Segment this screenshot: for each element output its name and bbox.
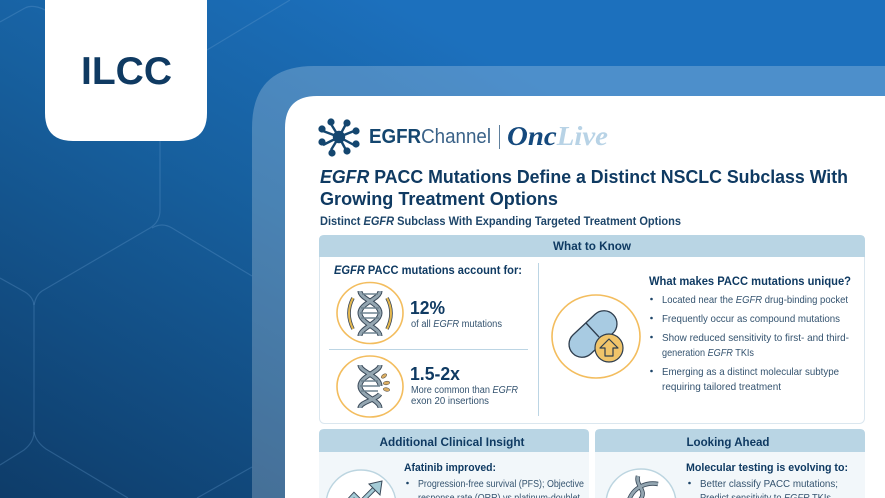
title: Growing Treatment Options bbox=[320, 188, 558, 209]
stat: 1.5-2x bbox=[411, 367, 518, 404]
stat: 12% bbox=[411, 301, 502, 327]
panel: what to know bbox=[319, 235, 865, 424]
insight header bbox=[319, 429, 589, 452]
bullet list: unique features: requiring tailored treatment bbox=[662, 381, 781, 393]
stat: 12%: of all EGFR mutations bbox=[411, 319, 502, 330]
icon: molecule bbox=[320, 120, 358, 155]
looking ahead heading: Molecular testing is evolving to: bbox=[686, 462, 848, 474]
ILCC tag bbox=[45, 0, 207, 141]
bullet list: unique features: Emerging as a distinct molecular subtype bbox=[662, 366, 839, 378]
left column heading: EGFR PACC mutations account for: bbox=[334, 265, 522, 277]
stat: 1.5-2x: 1.5-2x bbox=[410, 364, 460, 384]
looking ahead header: Looking Ahead bbox=[686, 435, 770, 449]
insight bullets bbox=[406, 478, 584, 498]
stat: 1.5-2x: exon 20 insertions bbox=[411, 396, 489, 407]
looking ahead bullets bbox=[688, 478, 838, 498]
icon: DNA strand bbox=[606, 469, 676, 498]
white document card bbox=[285, 96, 885, 498]
ILCC tag: ILCC bbox=[81, 50, 172, 93]
title: EGFR PACC Mutations Define a Distinct NSCLC Subclass With bbox=[320, 166, 848, 187]
bullet list: unique features bbox=[650, 294, 849, 393]
bullet list: unique features: Frequently occur as compound mutations bbox=[662, 313, 840, 325]
what to know header bbox=[319, 235, 865, 257]
stat: 1.5-2x: More common than EGFR bbox=[411, 385, 518, 396]
looking ahead bullets: Better classify PACC mutations; bbox=[700, 478, 838, 490]
insight bullets: Progression-free survival (PFS); Objective bbox=[418, 478, 584, 490]
panel: looking ahead bbox=[595, 429, 865, 498]
what to know header: What to Know bbox=[553, 239, 632, 253]
bullet list: unique features: Show reduced sensitivity to first- and third- bbox=[662, 332, 849, 344]
logo: EGFR Channel and OncLive: EGFRChannel bbox=[369, 126, 491, 148]
looking ahead header bbox=[595, 429, 865, 452]
logo: EGFR Channel and OncLive bbox=[320, 120, 608, 155]
bullet list: unique features: Located near the EGFR drug-binding pocket bbox=[662, 294, 848, 306]
icon: DNA with arcs bbox=[337, 282, 403, 344]
title bbox=[320, 166, 848, 209]
insight heading: Afatinib improved: bbox=[404, 462, 496, 474]
logo: EGFR Channel and OncLive: OncLive bbox=[507, 121, 608, 151]
outer translucent frame bbox=[252, 66, 885, 498]
icon: rising arrow bbox=[326, 470, 396, 498]
icon: DNA with fragments bbox=[337, 356, 403, 417]
stat: 12%: 12% bbox=[410, 298, 445, 318]
subtitle: Distinct EGFR Subclass With Expanding Targeted Treatment Options bbox=[320, 214, 681, 228]
unique heading: What makes PACC mutations unique? bbox=[649, 274, 851, 288]
insight header: Additional Clinical Insight bbox=[380, 435, 524, 449]
panel: additional clinical insight bbox=[319, 429, 589, 498]
bullet list: unique features: generation EGFR TKIs bbox=[662, 347, 754, 359]
icon: pill with up arrow bbox=[552, 295, 640, 378]
